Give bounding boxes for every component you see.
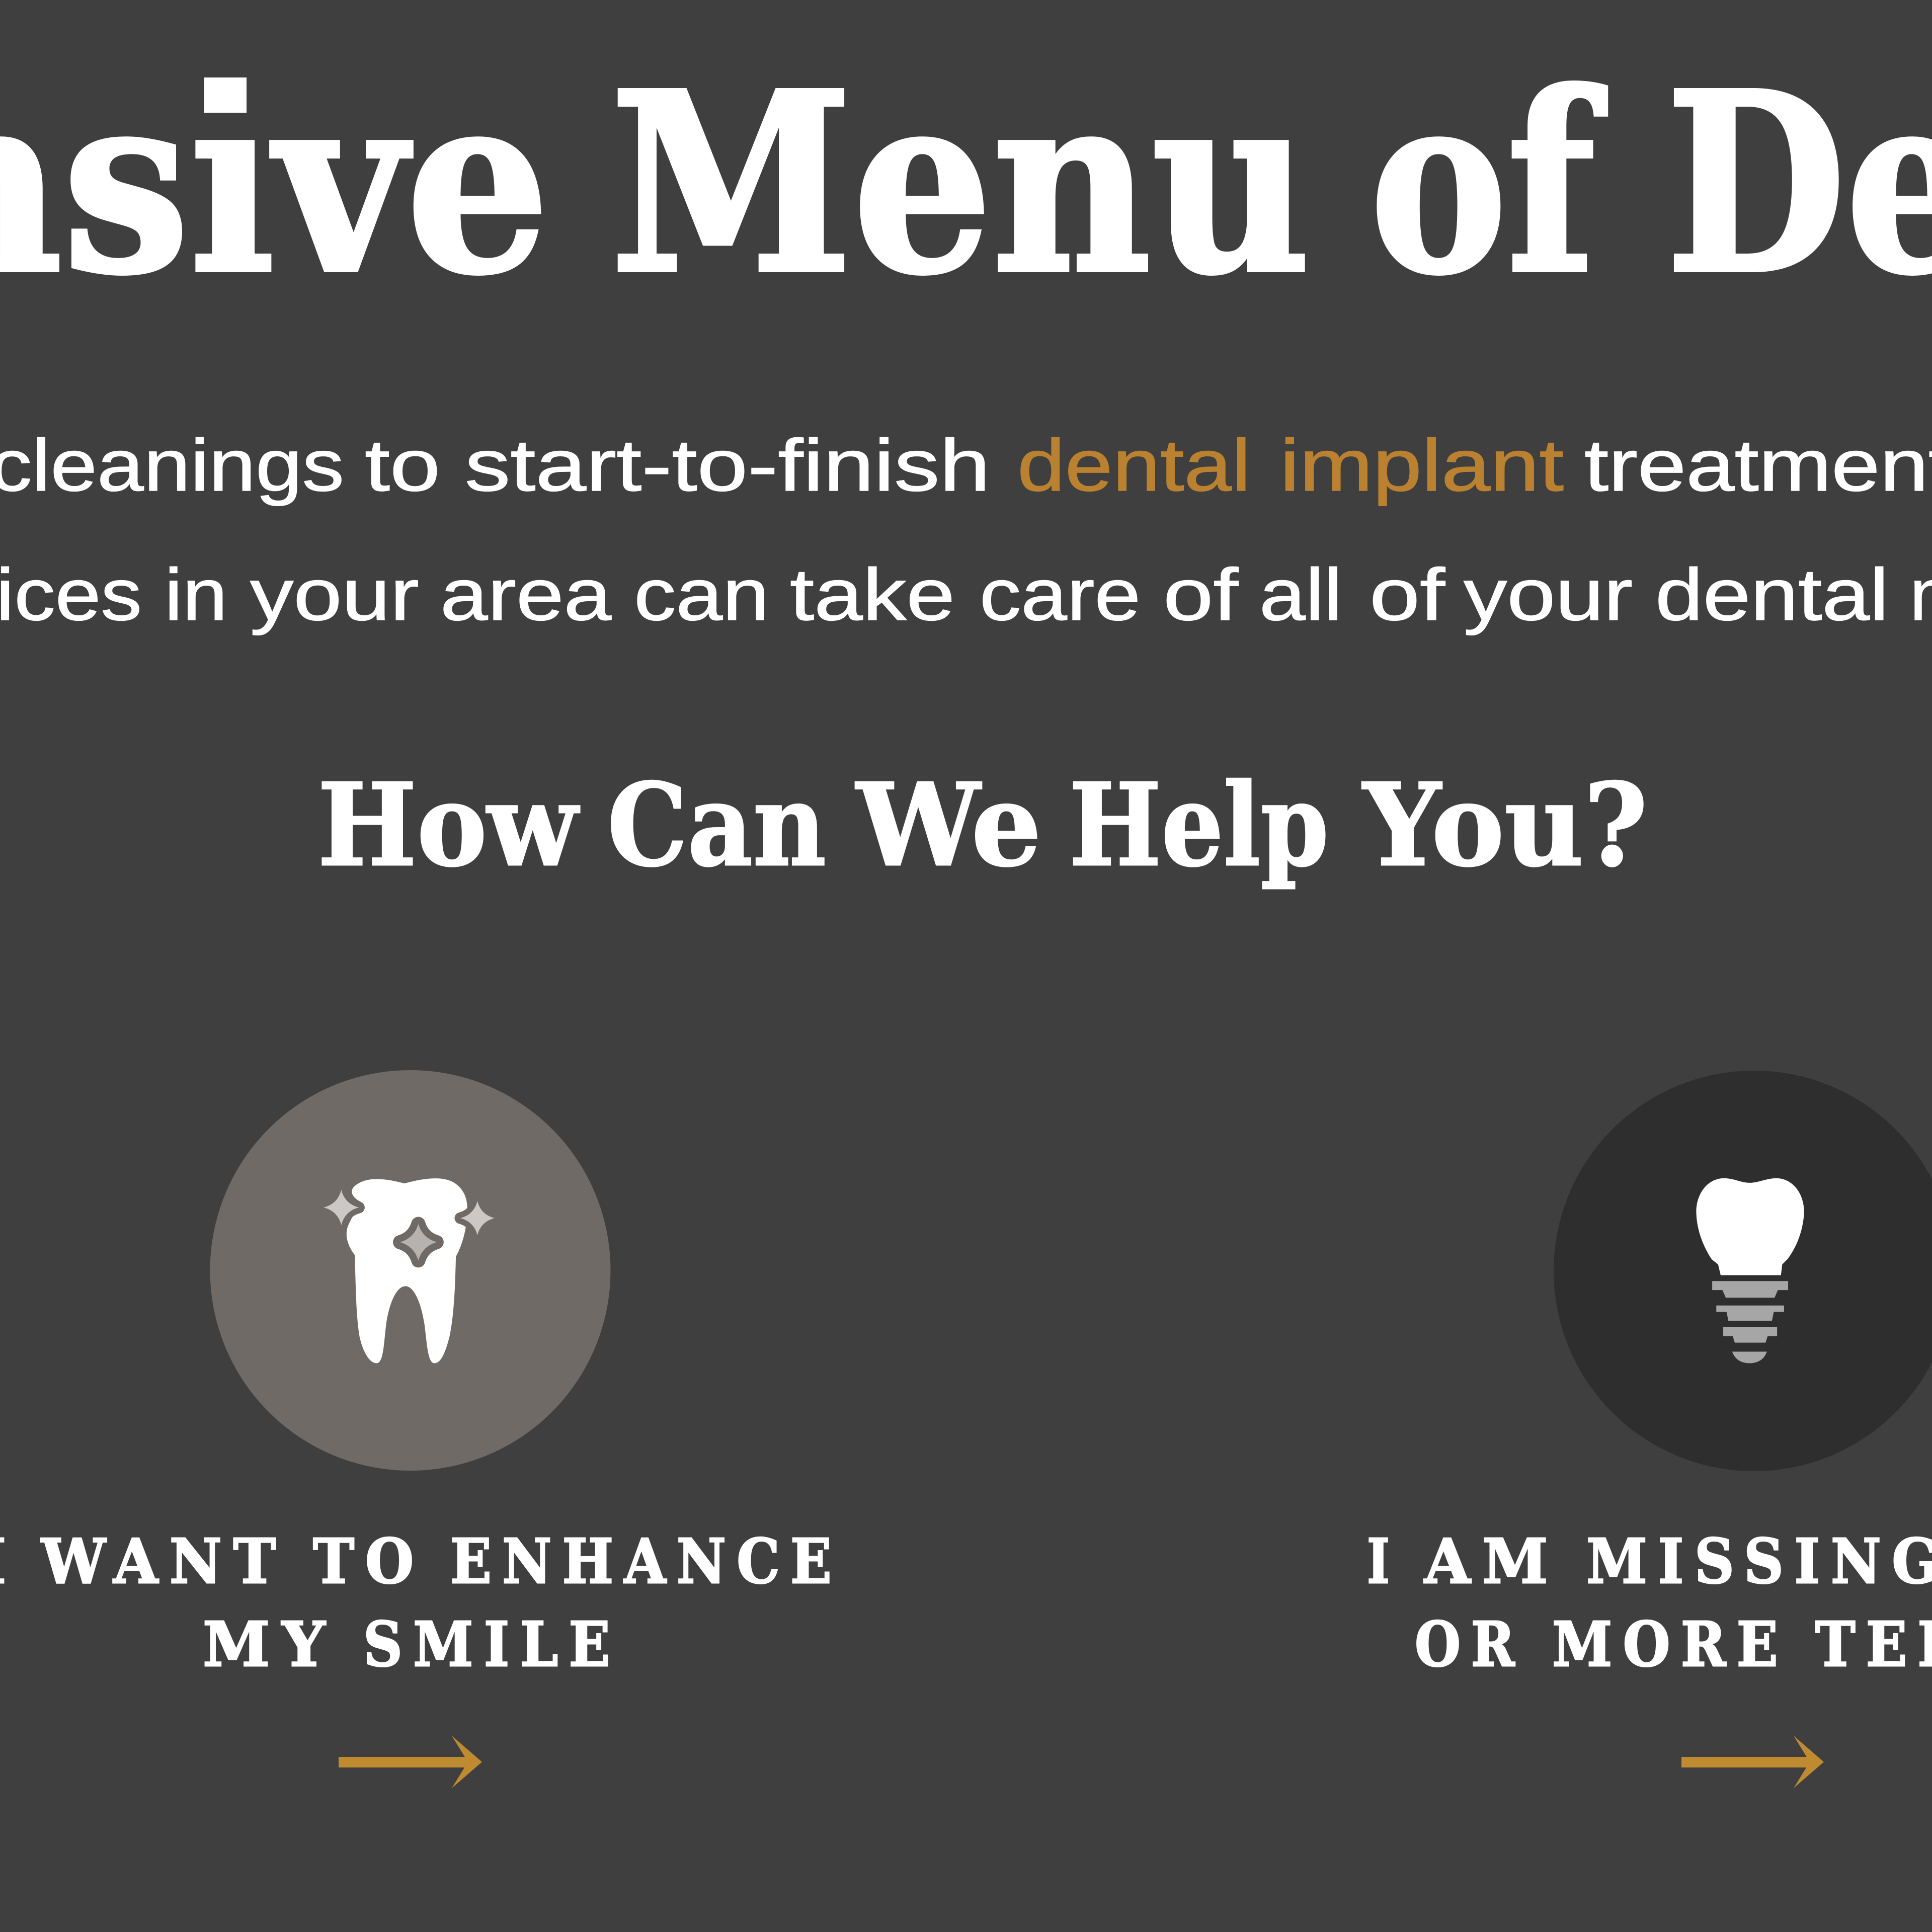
arrow: enhance smile [339, 1736, 482, 1788]
intro text line 1: to [365, 424, 440, 506]
arrow: missing teeth [1681, 1736, 1824, 1788]
intro text line 2: care [980, 553, 1141, 635]
intro text line 1: implant [1280, 424, 1564, 506]
label: enhance smile [0, 1525, 842, 1680]
label: enhance smile: SMILE [363, 1608, 621, 1680]
title: Menu [610, 38, 1311, 329]
label: missing teeth: OR [1415, 1608, 1525, 1680]
icon: sparkling tooth [324, 1178, 495, 1363]
intro text line 2: your [1464, 553, 1633, 635]
heading: how can we help: You? [1362, 759, 1648, 892]
heading: how can we help: Help [1069, 759, 1329, 892]
label: missing teeth: MORE [1552, 1608, 1789, 1680]
intro text line 1 [0, 424, 1932, 506]
intro text line 2: in [165, 553, 227, 635]
intro text line 2: take [790, 553, 955, 635]
title [0, 38, 1932, 329]
intro text line 2: area [440, 553, 612, 635]
label: enhance smile: WANT [40, 1525, 287, 1597]
label: enhance smile: ENHANCE [450, 1525, 842, 1597]
intro text line 2: of [1370, 553, 1445, 635]
intro text line 2: can [634, 553, 769, 635]
intro text line 2: dental [1655, 553, 1889, 635]
title: of [1370, 38, 1606, 329]
label: missing teeth: I [1367, 1525, 1390, 1597]
heading: how can we help [317, 759, 1648, 892]
intro text line 2 [0, 553, 1932, 635]
heading: how can we help: Can [607, 759, 826, 892]
circle: missing teeth [1554, 1071, 1932, 1471]
intro text line 1: treatment [1584, 424, 1932, 506]
intro text line 1: dental [1017, 424, 1251, 506]
heading: how can we help: How [317, 759, 580, 892]
intro text line 2: of [1163, 553, 1239, 635]
label: missing teeth [1367, 1525, 1932, 1680]
circle: enhance smile [210, 1070, 611, 1471]
heading: how can we help: We [855, 759, 1041, 892]
intro text line 2: all [1259, 553, 1342, 635]
intro text line 1: start-to-finish [465, 424, 990, 506]
intro text line 2: your [250, 553, 419, 635]
icon: dental implant [1696, 1178, 1804, 1363]
label: enhance smile: MY [203, 1608, 337, 1680]
label: enhance smile: TO [313, 1525, 425, 1597]
label: missing teeth: AM [1424, 1525, 1560, 1597]
